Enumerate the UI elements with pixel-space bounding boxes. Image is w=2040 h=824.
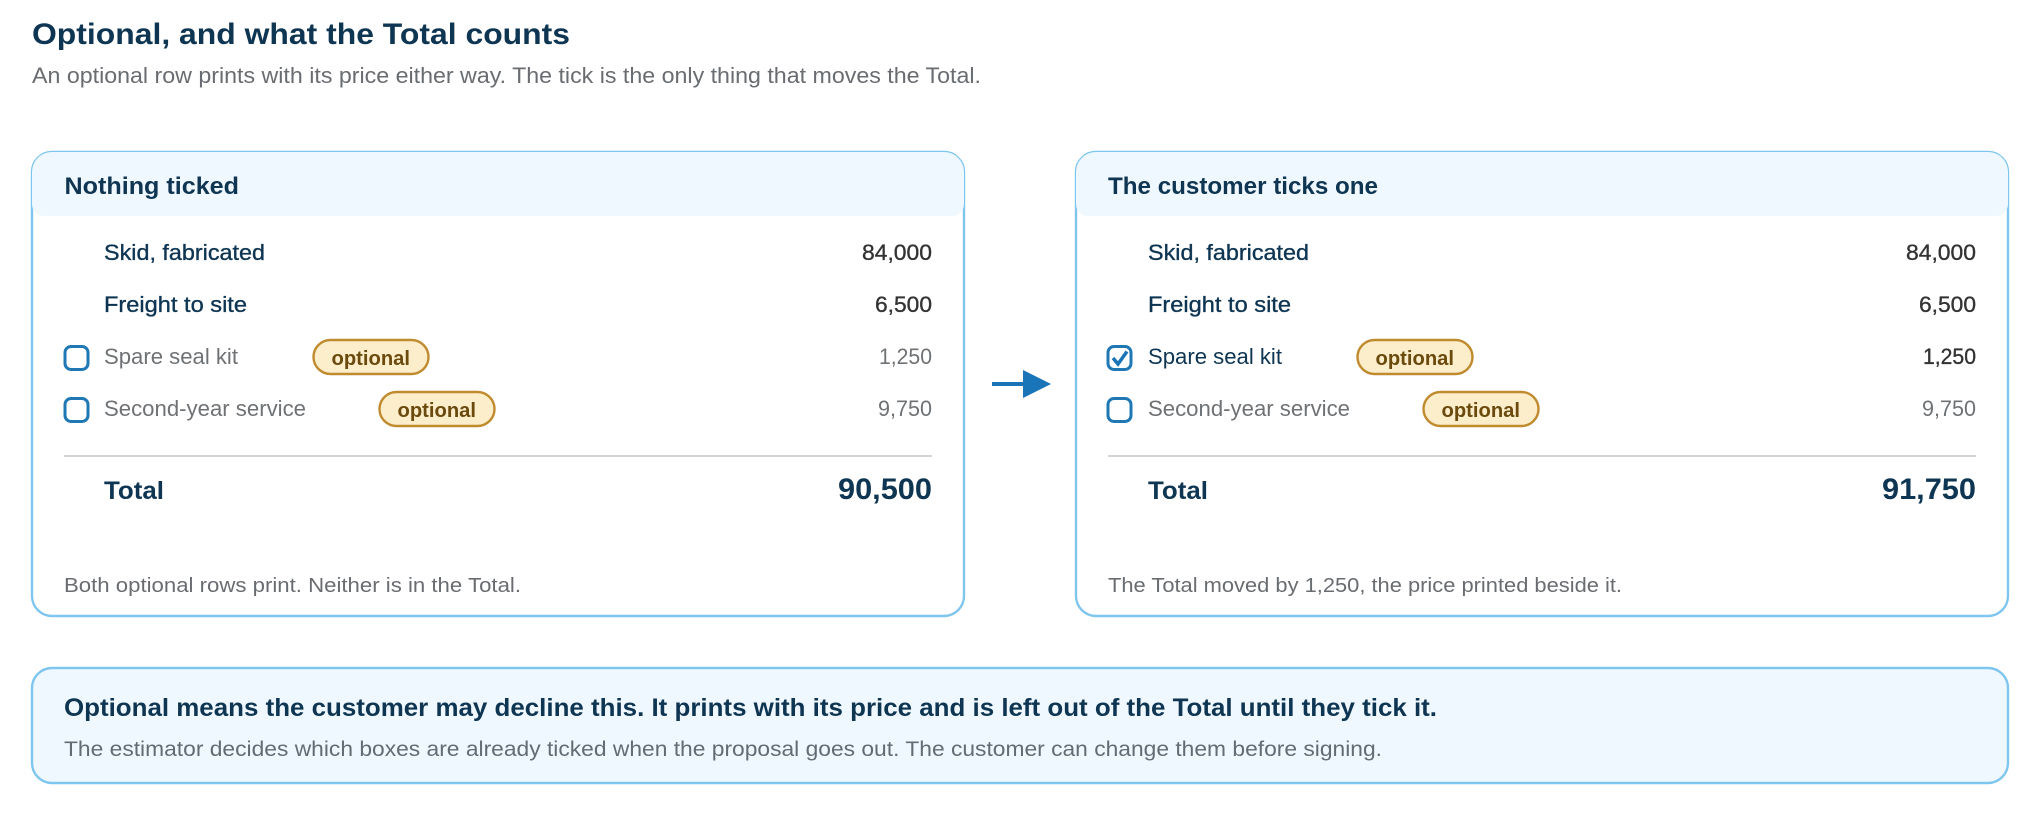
callout body: The estimator decides which boxes are already ticked when the proposal goes out. The customer can change them before signing.: [64, 738, 1382, 761]
row: spare seal kit, unticked: Spare seal kit: [104, 344, 238, 369]
row: skid: Skid, fabricated: [1148, 240, 1309, 265]
card outline: [32, 152, 964, 616]
total row: [104, 473, 932, 506]
row: freight: 6,500: [875, 292, 932, 317]
row: spare seal kit, unticked: 1,250: [879, 344, 932, 369]
row: second-year service, unticked: [1108, 392, 1976, 426]
total row: 90,500: [838, 473, 932, 506]
row: freight: Freight to site: [1148, 292, 1291, 317]
row: skid: 84,000: [1906, 240, 1976, 265]
card header band: [1076, 152, 2008, 216]
row: freight: 6,500: [1919, 292, 1976, 317]
title: Optional, and what the Total counts: [32, 18, 570, 51]
arrow: [992, 370, 1051, 398]
card heading: Nothing ticked: [64, 173, 239, 200]
row: second-year service, unticked: 9,750: [1922, 396, 1976, 421]
card heading: The customer ticks one: [1108, 173, 1378, 200]
card header band: [32, 152, 964, 216]
row: spare seal kit, ticked: Spare seal kit: [1148, 344, 1282, 369]
row: second-year service, unticked: optional: [1442, 400, 1520, 422]
card footnote: Both optional rows print. Neither is in the Total.: [64, 575, 521, 597]
row: spare seal kit, unticked: [65, 340, 932, 374]
total row: [1148, 473, 1976, 506]
card outline: [1076, 152, 2008, 616]
callout: definition of optional: [32, 668, 2008, 783]
row: spare seal kit, ticked: optional: [1376, 348, 1454, 370]
row: freight: [1148, 292, 1976, 317]
row: second-year service, unticked: 9,750: [878, 396, 932, 421]
row: spare seal kit, unticked: optional: [332, 348, 410, 370]
card footnote: The Total moved by 1,250, the price printed beside it.: [1108, 575, 1622, 597]
row: second-year service, unticked: Second-year service: [1148, 396, 1350, 421]
row: second-year service, unticked: Second-year service: [104, 396, 306, 421]
callout heading: Optional means the customer may decline this. It prints with its price and is left out of the Total until they tick it.: [64, 694, 1437, 722]
row: skid: 84,000: [862, 240, 932, 265]
row: spare seal kit, ticked: 1,250: [1923, 344, 1976, 369]
total row: Total: [1148, 477, 1208, 505]
row: skid: [104, 240, 932, 265]
row: skid: [1148, 240, 1976, 265]
row: second-year service, unticked: optional: [398, 400, 476, 422]
row: second-year service, unticked: [65, 392, 932, 426]
total row: 91,750: [1882, 473, 1976, 506]
row: freight: Freight to site: [104, 292, 247, 317]
row: spare seal kit, ticked: [1108, 340, 1976, 374]
row: skid: Skid, fabricated: [104, 240, 265, 265]
panel: the customer ticks one: [1076, 152, 2008, 616]
subtitle: An optional row prints with its price either way. The tick is the only thing that moves the Total.: [32, 63, 981, 88]
row: freight: [104, 292, 932, 317]
panel: nothing ticked: [32, 152, 964, 616]
total row: Total: [104, 477, 164, 505]
